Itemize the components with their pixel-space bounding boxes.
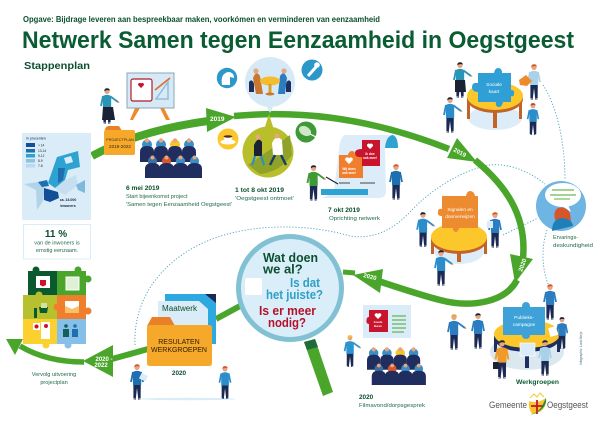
text: vervolg: projectplan xyxy=(40,380,68,386)
circle: meeting at table xyxy=(245,57,295,113)
logo: Gemeente Oegstgeest: Oegstgeest xyxy=(547,400,588,410)
arrowhead: 2019 right: 2019 xyxy=(452,147,467,159)
map panel: in procenten xyxy=(26,136,46,140)
dotted connection lines xyxy=(135,85,565,345)
text: filmavond: 2020 xyxy=(359,394,374,401)
text: ervarings-deskundigheid: deskundigheid xyxy=(553,243,593,249)
scroll with puzzle posters: Ik doe xyxy=(365,152,375,156)
circle: walking people xyxy=(242,114,294,178)
magnifier: we al? xyxy=(262,262,303,276)
icon: coffee xyxy=(218,128,238,150)
magnifier xyxy=(238,236,342,396)
table: sociale kaart: kaart xyxy=(489,89,500,95)
text: 1 tot 8 okt 2019 xyxy=(235,187,294,202)
text: 2020 results: 2020 xyxy=(172,370,187,377)
map panel: 13-14 xyxy=(38,149,46,153)
text: ervarings-deskundigheid xyxy=(553,235,593,249)
arrowhead: 2020 right: 2020 xyxy=(518,257,529,273)
presenter xyxy=(345,335,361,367)
avatar: ervaringsdeskundige xyxy=(536,181,586,231)
statistic box: 11 %: 11 % xyxy=(45,229,67,240)
scroll with puzzle posters: Wij doen xyxy=(342,167,356,171)
text: 6 mei 2019: 6 mei 2019 xyxy=(126,185,160,192)
folder: resultaten werkgroepen: RESULATEN xyxy=(158,339,200,346)
folder: resultaten werkgroepen: WERKGROEPEN xyxy=(151,347,207,354)
text: 1 tot 8 okt 2019: 1 tot 8 okt 2019 xyxy=(235,187,284,194)
table: signalen en doorverwijzen: doorverwijzen xyxy=(445,214,475,220)
subtitle: Opgave: Bijdrage leveren aan bespreekbaar maken, voorkómen en verminderen van eenzaamheid xyxy=(23,14,380,24)
arrowhead: 2020 right xyxy=(510,254,533,283)
text: 6 mei 2019 xyxy=(126,185,232,208)
text: vervolg xyxy=(32,372,76,386)
ground line with two persons xyxy=(131,364,236,400)
arrowhead: 2019: 2019 xyxy=(210,116,225,123)
table: publiekscampagne xyxy=(490,284,567,378)
audience: start meeting xyxy=(140,138,202,178)
table: publiekscampagne: campagne xyxy=(513,323,536,328)
map panel: 7-8 xyxy=(38,164,43,168)
map panel: 8-9 xyxy=(38,159,43,163)
magnifier: het juiste? xyxy=(266,287,323,302)
arrowhead: 2020-2022: 2020 - xyxy=(95,357,113,363)
heading: werkgroepen: Werkgroepen xyxy=(516,379,559,386)
magnifier: Is er meer xyxy=(259,303,316,318)
text: 6 mei 2019: 'Samen tegen Eenzaamheid Oegstgeest' xyxy=(126,202,232,208)
film card: Buren xyxy=(374,324,382,328)
logo: Gemeente Oegstgeest: Gemeente xyxy=(489,400,527,410)
audience: film night xyxy=(367,347,426,385)
table: publiekscampagne: Publieks- xyxy=(514,315,534,321)
text: filmavond: Filmavond/dorpsgesprek xyxy=(359,403,425,409)
arrowhead: 2020-2022 xyxy=(83,345,113,377)
magnifier: Wat doen xyxy=(263,250,318,265)
folder: projectplan xyxy=(104,126,135,155)
scroll with puzzle posters: ook mee! xyxy=(363,156,377,160)
film card: Goede xyxy=(374,320,383,324)
section heading: Stappenplan xyxy=(24,60,90,72)
arrowhead: 2020: 2020 xyxy=(363,273,378,282)
map panel: > 14 xyxy=(38,144,45,148)
statistic box: 11 %: van de inwoners is xyxy=(34,240,80,246)
magnifier: nodig? xyxy=(268,315,306,330)
arrowhead: 2020 xyxy=(353,269,383,293)
film card xyxy=(363,305,411,338)
arrowhead: 2020-2022: 2022 xyxy=(94,363,108,369)
table: sociale kaart xyxy=(444,62,540,135)
map panel xyxy=(22,133,91,220)
folder: resultaten werkgroepen xyxy=(147,294,216,366)
table: signalen en doorverwijzen: Signalen en xyxy=(447,207,473,213)
scroll with puzzle posters: ook mee! xyxy=(342,171,356,175)
map panel: ca. 24.000 xyxy=(60,198,76,202)
flip chart with presenter xyxy=(101,73,174,124)
credit: Infographic: Lard Meijs xyxy=(579,331,583,365)
folder: projectplan: 2019-2022 xyxy=(109,144,131,149)
scroll with puzzle posters xyxy=(308,135,402,200)
text: 7 okt 2019: 7 okt 2019 xyxy=(328,207,360,214)
text: filmavond xyxy=(359,394,425,409)
magnifier: Is dat xyxy=(290,275,321,290)
text: ervarings-deskundigheid: Ervarings- xyxy=(553,235,578,241)
main green arrow route xyxy=(20,114,523,362)
puzzle of results xyxy=(23,266,92,348)
icon: wrench xyxy=(302,60,322,80)
map panel: 9-12 xyxy=(38,154,45,158)
table: signalen en doorverwijzen xyxy=(417,191,501,286)
folder: resultaten werkgroepen: Maatwerk xyxy=(162,304,198,313)
text: 6 mei 2019: Start bijeenkomst project xyxy=(126,194,188,200)
icon: tennis xyxy=(296,122,316,142)
arrowhead: 2019 right xyxy=(447,138,477,162)
text: vervolg: Vervolg uitvoering xyxy=(32,372,76,378)
map panel: inwoners xyxy=(60,204,76,208)
arrowhead: 2019 xyxy=(206,108,236,132)
text: 7 okt 2019: Oprichting netwerk xyxy=(329,216,380,222)
text: 7 okt 2019 xyxy=(328,207,380,222)
title: Netwerk Samen tegen Eenzaamheid in Oegstgeest xyxy=(22,27,574,54)
arrowhead: end xyxy=(6,339,23,355)
icon: horse xyxy=(217,68,237,88)
statistic box: 11 % xyxy=(24,224,90,259)
text: 1 tot 8 okt 2019: 'Oegstgeest ontmoet' xyxy=(235,196,294,202)
table: sociale kaart: Sociale xyxy=(486,82,502,88)
handshake persons xyxy=(448,313,484,350)
logo: Gemeente Oegstgeest xyxy=(489,393,588,416)
statistic box: 11 %: ernstig eenzaam. xyxy=(36,248,79,254)
folder: projectplan: PROJECTPLAN xyxy=(106,138,134,142)
